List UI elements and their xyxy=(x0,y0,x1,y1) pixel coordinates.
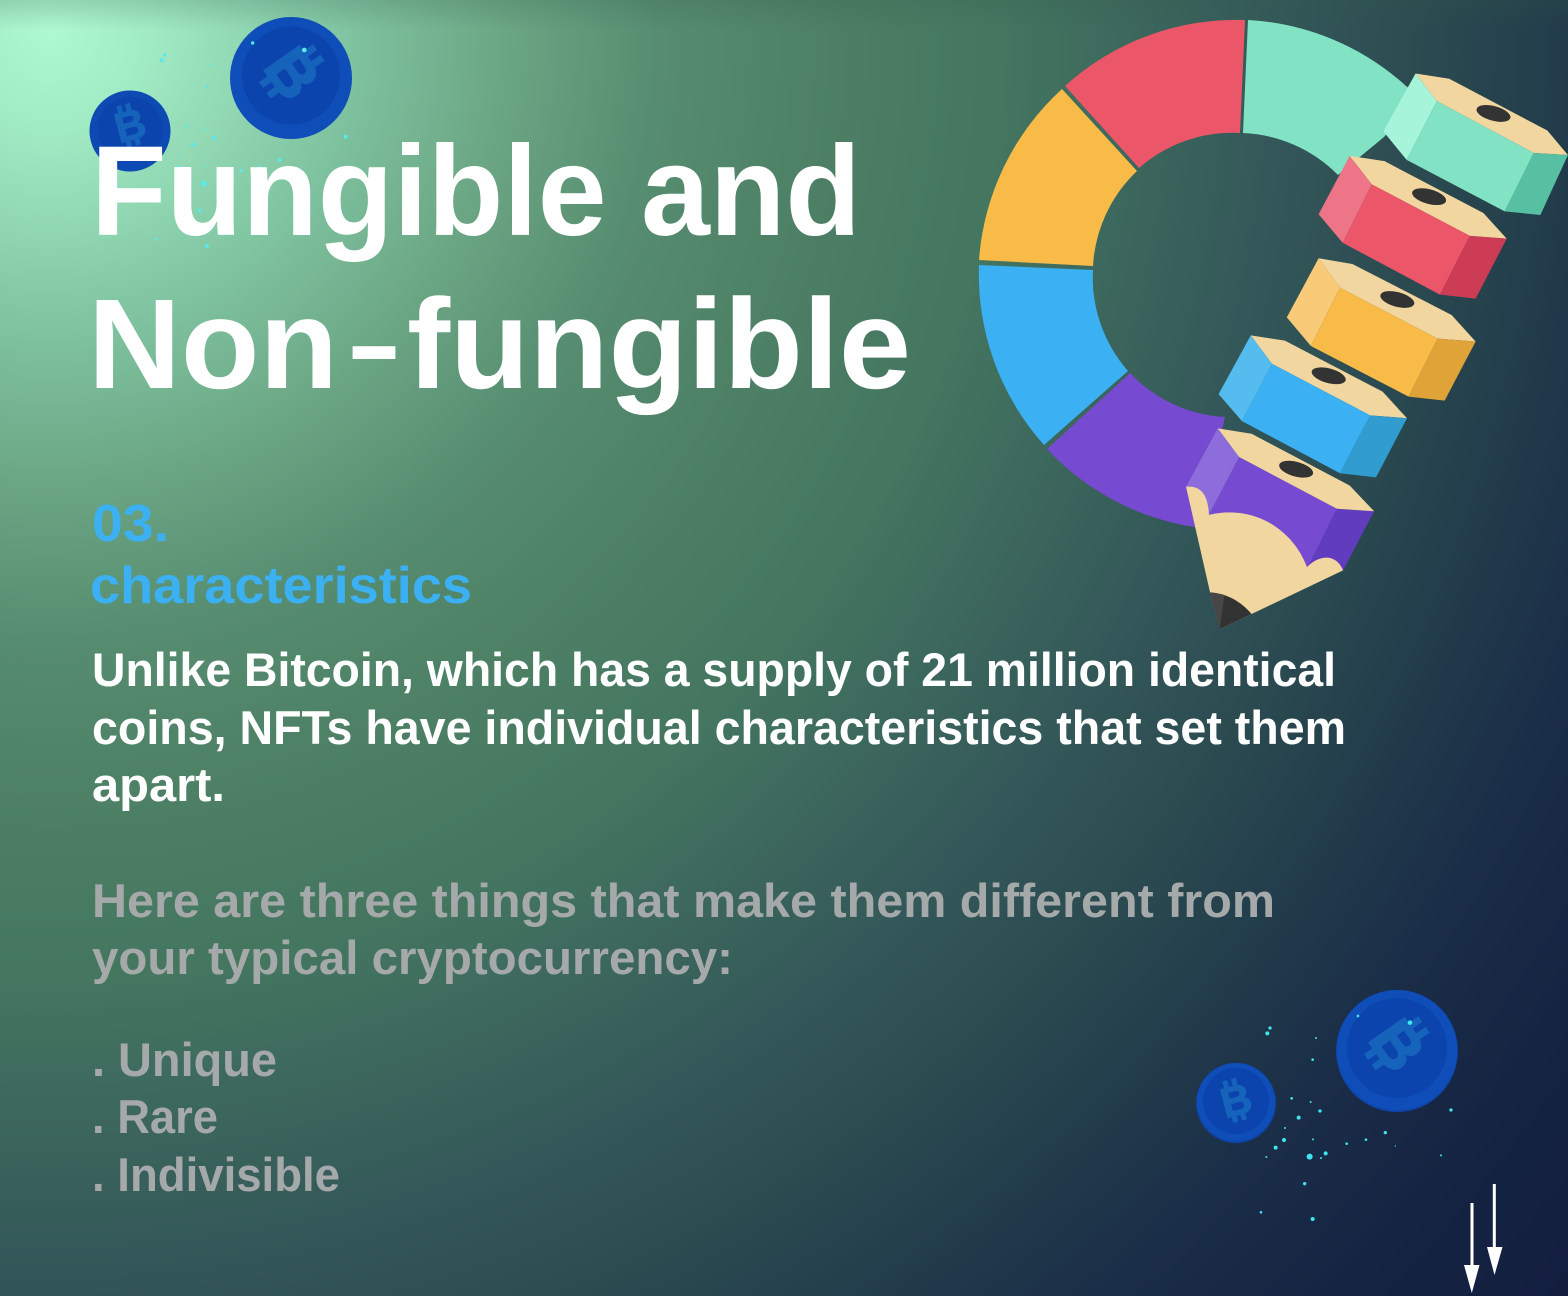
ring segments xyxy=(979,20,1420,528)
list of traits: . Rare xyxy=(92,1090,218,1143)
pencil segment: blue xyxy=(1219,335,1407,477)
list of traits: . Indivisible xyxy=(92,1148,340,1201)
pencil segments xyxy=(1186,73,1568,629)
title: – xyxy=(350,272,398,415)
particles: top left xyxy=(154,41,348,248)
title: fungible xyxy=(407,273,911,416)
arrow: down, left xyxy=(1464,1203,1480,1293)
particles: bottom right xyxy=(1260,1015,1453,1221)
pencil segment: teal xyxy=(1383,73,1568,215)
icon: large bitcoin coin, top xyxy=(230,17,352,139)
section label: characteristics xyxy=(90,557,472,615)
pencil segment: red xyxy=(1319,156,1507,299)
intro paragraph: Unlike Bitcoin, which has a supply of 21 million identical xyxy=(92,643,1336,696)
list of traits xyxy=(92,1033,340,1201)
icon: large bitcoin coin, bottom right xyxy=(1336,990,1458,1112)
lead-in paragraph: your typical cryptocurrency: xyxy=(92,931,733,984)
section label xyxy=(90,495,472,615)
lead-in paragraph xyxy=(92,874,1275,984)
intro paragraph xyxy=(92,643,1346,811)
pencil tip: purple with lead xyxy=(1186,428,1374,629)
lead-in paragraph: Here are three things that make them different from xyxy=(92,874,1275,927)
icon: small bitcoin coin, bottom right xyxy=(1196,1063,1276,1143)
icon: large bitcoin coin, top: B xyxy=(251,36,333,112)
list of traits: . Unique xyxy=(92,1033,277,1086)
intro paragraph: apart. xyxy=(92,758,225,811)
arrow: down, right xyxy=(1487,1184,1502,1275)
icon: large bitcoin coin, bottom right: B xyxy=(1356,1008,1438,1084)
title xyxy=(88,120,911,416)
pencil segment: yellow xyxy=(1287,258,1476,401)
title: Non xyxy=(88,273,338,416)
icon: small bitcoin coin, top left xyxy=(90,90,170,172)
icon: small bitcoin coin, top left: B xyxy=(109,99,151,152)
icon: small bitcoin coin, bottom right: B xyxy=(1215,1074,1257,1127)
section label: 03. xyxy=(92,495,169,553)
intro paragraph: coins, NFTs have individual characteristics that set them xyxy=(92,701,1346,754)
title: Fungible and xyxy=(91,120,861,263)
donut chart with pencil xyxy=(979,20,1568,629)
